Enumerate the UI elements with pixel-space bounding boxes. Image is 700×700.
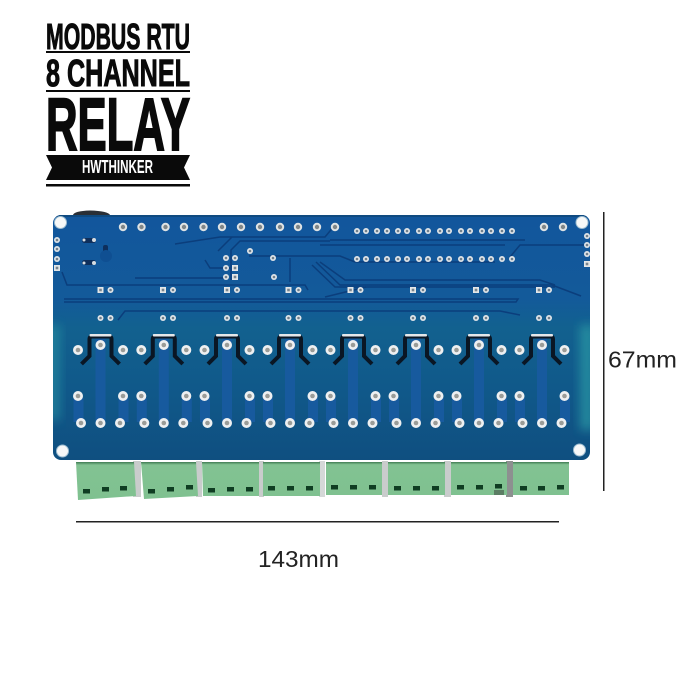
terminal block 7	[451, 461, 513, 497]
terminal block 5	[326, 461, 388, 497]
ribbon banner: HWTHINKER: HWTHINKER	[82, 157, 153, 177]
title line: RELAY: RELAY	[46, 83, 190, 166]
driver pad pairs	[98, 287, 552, 321]
width dimension line	[76, 521, 559, 522]
top row through-hole pads	[119, 223, 567, 231]
corner mounting holes	[54, 216, 588, 457]
terminal block 6	[388, 461, 451, 497]
title block	[46, 16, 190, 186]
relay 3	[200, 334, 255, 428]
relay 6	[388, 334, 444, 428]
title line: 8 CHANNEL: 8 CHANNEL	[46, 53, 190, 95]
relay footprints	[73, 334, 570, 428]
terminal blocks	[76, 461, 569, 500]
height dimension line	[603, 212, 604, 491]
relay board	[48, 210, 594, 500]
height label: 67mm	[608, 346, 677, 372]
left header pads	[54, 237, 60, 271]
PCB base	[48, 215, 594, 460]
right header pads	[584, 233, 590, 267]
terminal block 2	[141, 461, 202, 499]
relay 2	[136, 334, 192, 428]
terminal block 3	[202, 461, 264, 497]
copper traces	[62, 225, 590, 320]
terminal block 4	[263, 461, 325, 497]
ribbon banner: HWTHINKER	[46, 155, 190, 180]
terminal block 1	[76, 461, 141, 500]
IC header pad row 1	[354, 228, 515, 234]
relay 7	[452, 334, 507, 428]
IC header pad row 2	[354, 256, 515, 262]
title line: MODBUS RTU: MODBUS RTU	[46, 16, 190, 57]
width label: 143mm	[258, 546, 339, 572]
top connector edge	[73, 210, 110, 215]
center pad cluster	[223, 248, 277, 280]
jumper components	[82, 238, 112, 265]
relay 1	[73, 334, 128, 428]
relay 5	[326, 334, 381, 428]
relay 8	[514, 334, 570, 428]
relay 4	[262, 334, 318, 428]
terminal block 8	[513, 462, 569, 495]
